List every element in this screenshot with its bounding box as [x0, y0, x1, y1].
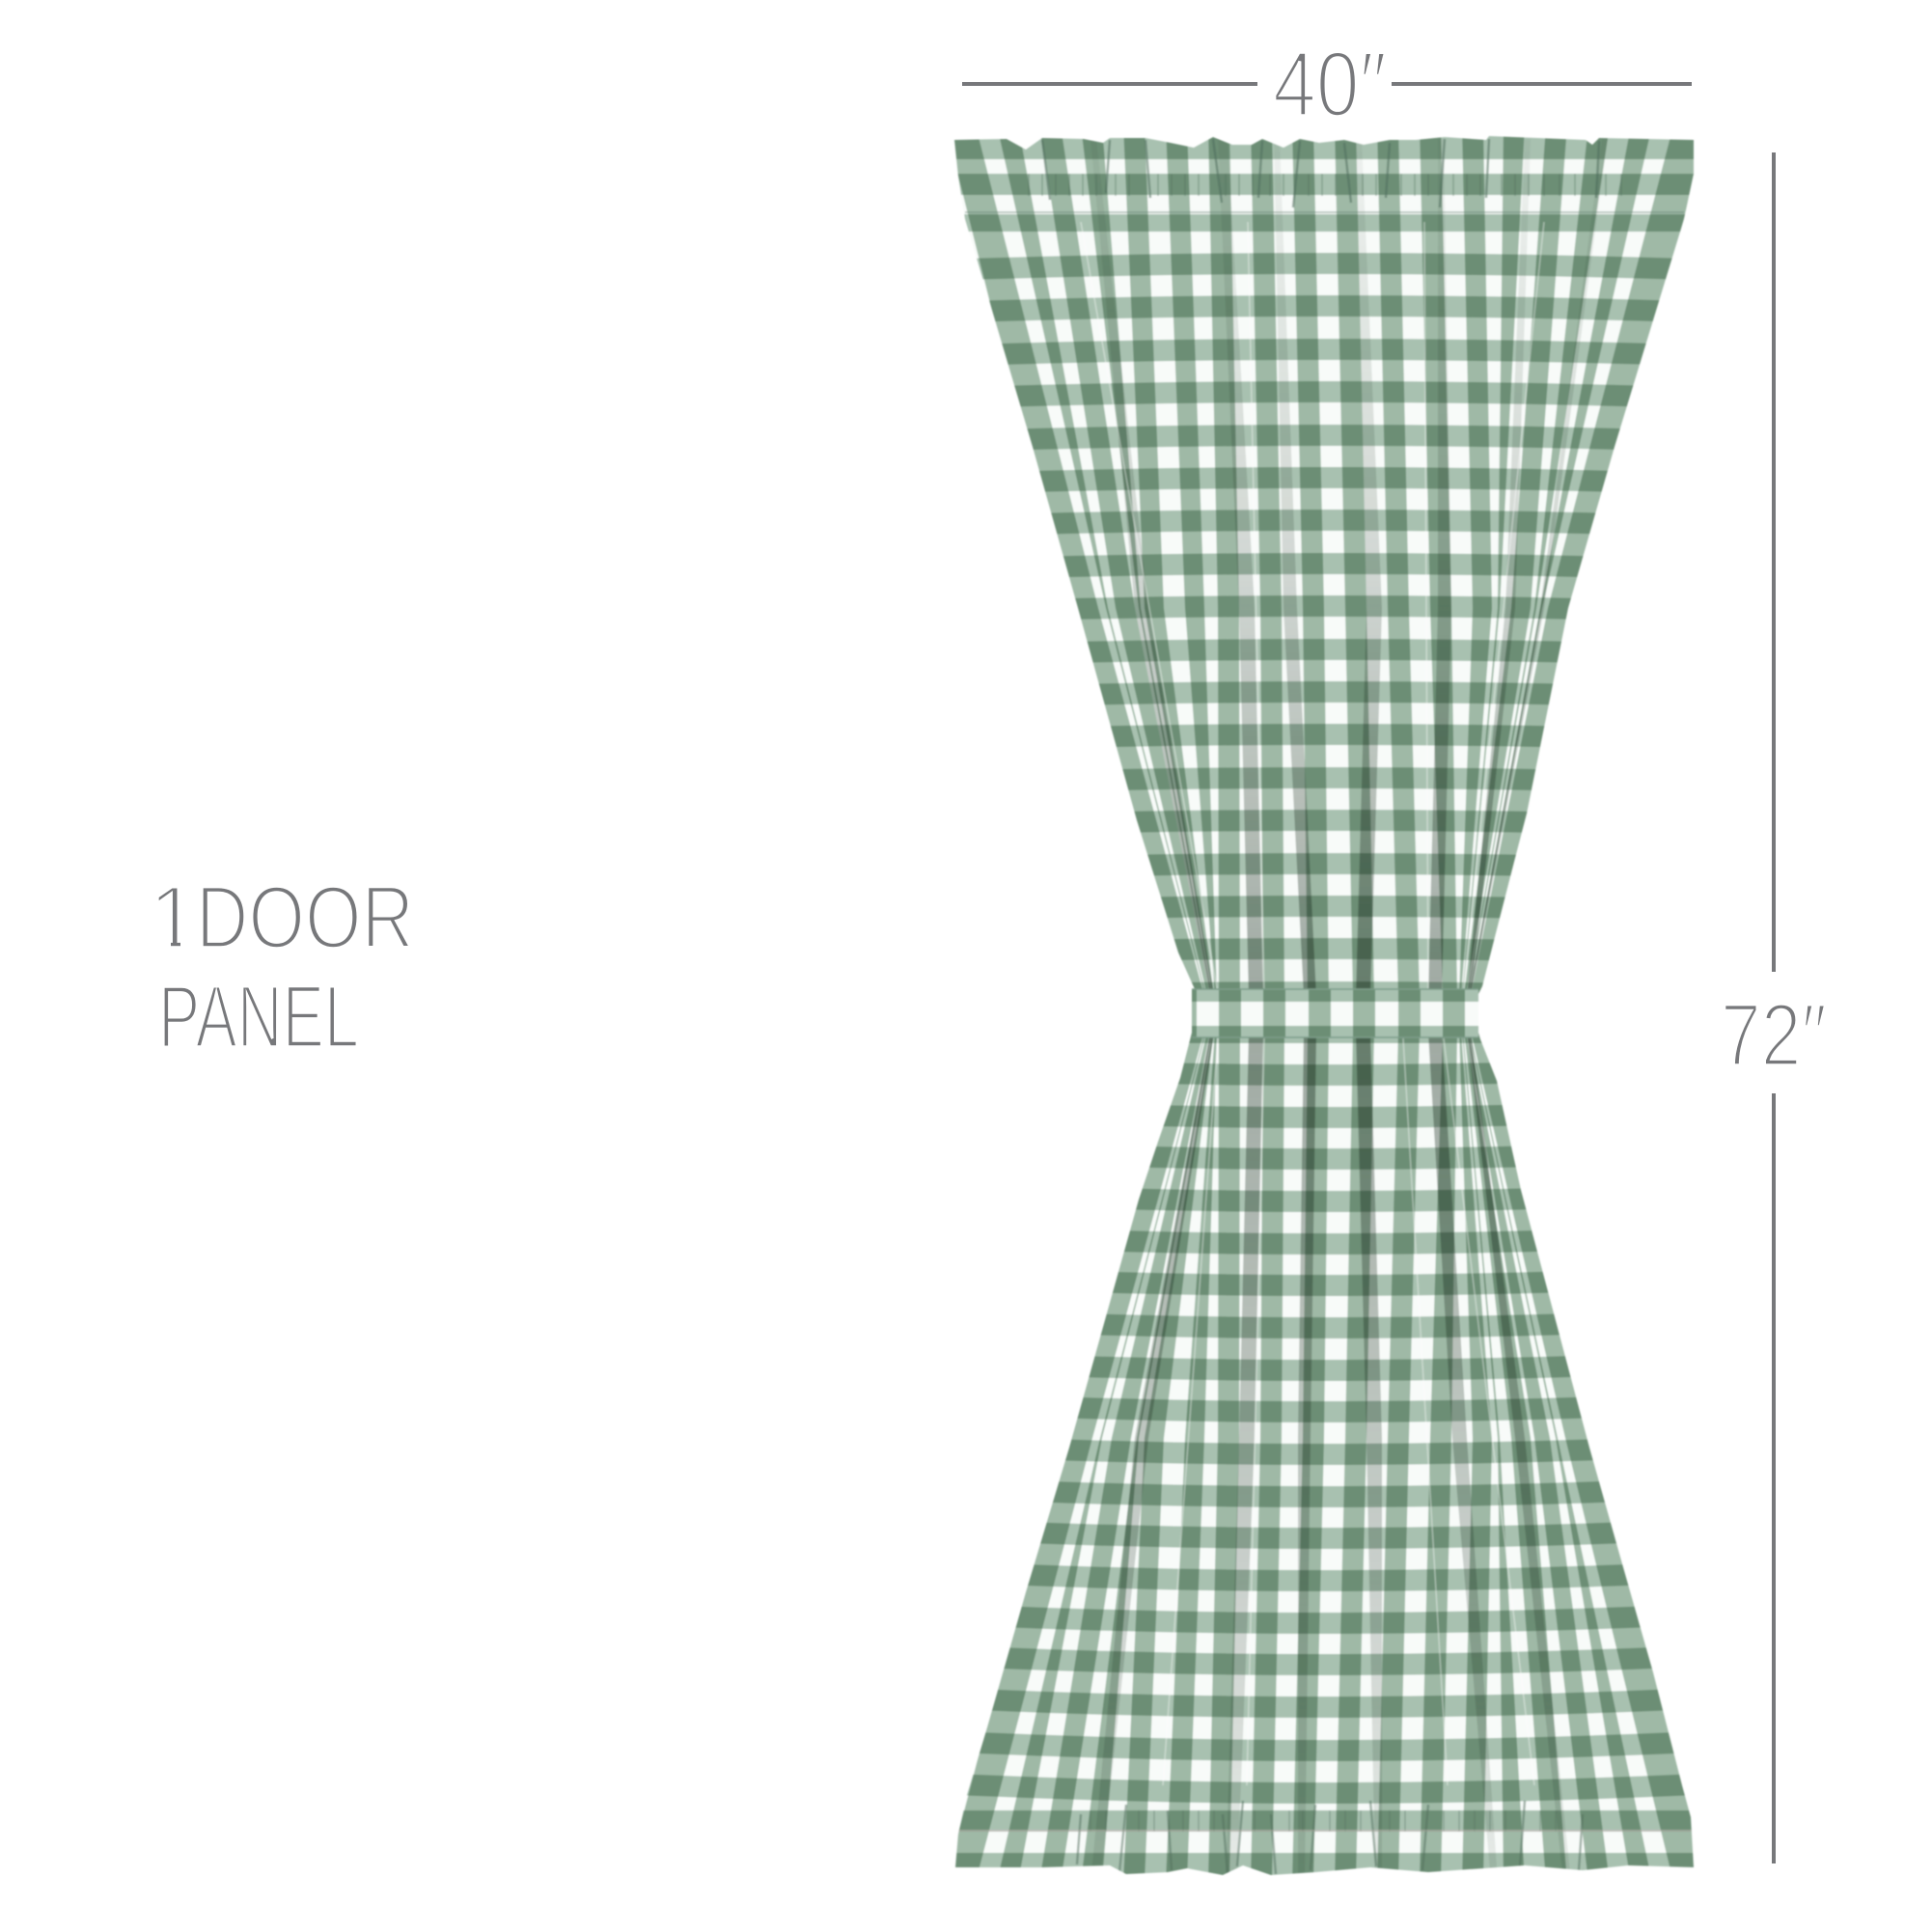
height line bottom: [1772, 1093, 1776, 1863]
label: 1 door panel: [145, 869, 414, 1066]
label line: panel: PANEL: [158, 968, 359, 1066]
gingham curtain panel: [936, 125, 1727, 1891]
width line right: [1392, 82, 1692, 86]
curtain tieback: [1192, 989, 1478, 1037]
rod pocket gathers: [965, 139, 1684, 212]
height line top: [1772, 152, 1776, 972]
curtain lower section: [936, 1023, 1727, 1891]
label word: door: DOOR: [196, 869, 414, 967]
width line left: [962, 82, 1257, 86]
height dimension: 72 inches: [1721, 152, 1827, 1863]
bottom hem gathers: [957, 1801, 1694, 1874]
label numeral: 1: 1: [149, 869, 198, 967]
height value: 72″: [1721, 986, 1827, 1085]
width dimension: 40 inches: [962, 33, 1692, 136]
width value: 40″: [1273, 33, 1387, 136]
curtain upper section: [936, 125, 1727, 1009]
